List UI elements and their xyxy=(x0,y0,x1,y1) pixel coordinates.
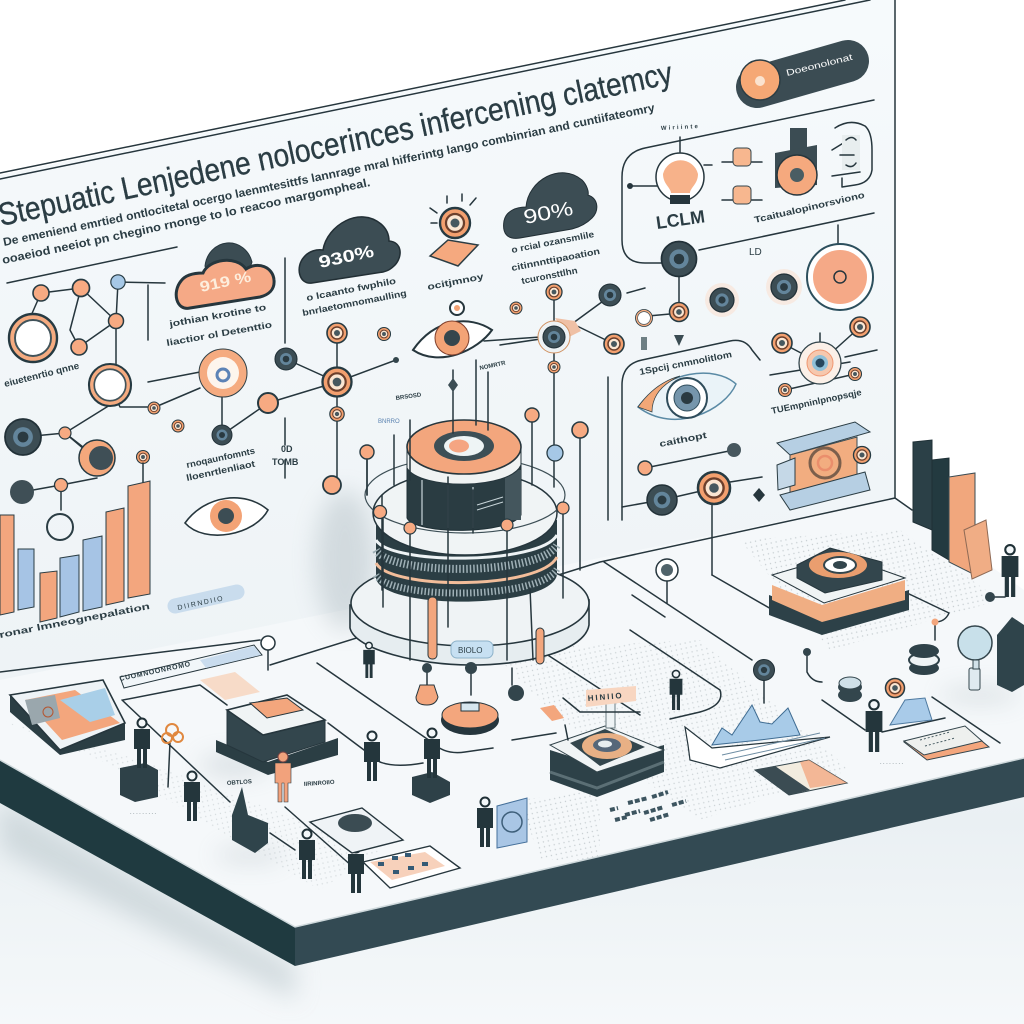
caption: third stat: citinnnttipaoation xyxy=(510,246,601,273)
caption: third stat: tcuronsttlhn xyxy=(520,265,578,286)
caption: dark stat xyxy=(301,276,407,318)
cloud: orange stat xyxy=(176,243,274,308)
tower drum xyxy=(407,462,521,530)
small tags above tower: BRSOSD xyxy=(395,392,422,402)
long pill on floor: CUOMNOONROMO xyxy=(119,661,191,683)
small pill label xyxy=(175,592,237,612)
tower middle disc xyxy=(373,471,557,555)
node row, centre left xyxy=(148,323,399,495)
central eye node cluster xyxy=(484,284,684,354)
floor wiring xyxy=(0,498,1000,867)
label: eye panel: 1Spcij cnmnolitlom xyxy=(638,349,733,377)
small tags above tower xyxy=(378,360,507,425)
icon: layered book stack xyxy=(777,422,870,510)
caption: dark stat: o lcaanto fwphilo xyxy=(305,276,397,303)
tower badge xyxy=(451,641,493,658)
label: large eye: caithopt xyxy=(658,430,708,449)
tower striped bands xyxy=(376,520,557,602)
caption: orange stat: liactior ol Detenttio xyxy=(166,319,273,348)
icon: large eye xyxy=(638,373,736,419)
orange person xyxy=(275,752,291,802)
pedestal left xyxy=(120,763,158,802)
bars, right side xyxy=(913,440,992,579)
orange rings pin xyxy=(162,724,183,787)
tower top white rim xyxy=(407,445,521,484)
pedestal centre xyxy=(412,772,450,803)
centre floor pieces: orange knobs xyxy=(416,662,524,735)
person 5 xyxy=(364,732,380,781)
floor shadows xyxy=(200,490,1020,862)
cloud: dark stat: 930% xyxy=(317,242,376,272)
badge pill: Doeonolonat xyxy=(785,52,854,78)
caption: third stat: o rcial ozansmlile xyxy=(510,229,595,255)
small tags above tower: BNRRO xyxy=(378,419,400,425)
labels on floor: OBTLOS xyxy=(227,779,252,787)
subtitle: ooaeiod neeiot pn chegino rnonge to lo reacoo margompheal. xyxy=(1,177,371,267)
back wall panel xyxy=(0,0,912,680)
label: network: eiuetenrtio qnne xyxy=(3,361,80,390)
obelisk xyxy=(232,787,268,853)
label: bar chart: ronar lmneognepalation xyxy=(0,601,151,640)
flow squares xyxy=(722,148,762,204)
subtitle: De emeniend emrtied ontlocitetal ocergo laenmtesittfs lannrage mral hifferintg lango combinrian and cuntiifateomry xyxy=(2,102,656,249)
labels on floor: · · · · · · · · · xyxy=(130,811,156,817)
cloud: third stat xyxy=(504,173,597,238)
icon: sensor with rays xyxy=(430,194,478,266)
person 8 xyxy=(363,642,375,678)
long pill on floor xyxy=(119,645,262,688)
icon: face outline xyxy=(832,122,872,187)
small pill label: DIIRNDIIO xyxy=(177,595,224,612)
pin lines around tower xyxy=(367,360,608,664)
caption: centre left: lloenrtlenliaot xyxy=(185,459,256,483)
label: sensor: ocitjmnoy xyxy=(426,271,484,292)
badge pill xyxy=(740,52,854,100)
caption: centre left: rnoqaunfomnts xyxy=(185,446,256,470)
person 4 xyxy=(348,844,364,893)
orange tag with stem: HINIIO xyxy=(587,691,622,703)
list tiles xyxy=(610,792,686,820)
arrow: vertical xyxy=(284,258,286,343)
caption: device: Tcaitualopinorsviono xyxy=(753,190,866,225)
cloud: orange stat: 919 % xyxy=(198,268,253,296)
ring with blue forms xyxy=(886,678,932,725)
small tags above tower: NOMRTR xyxy=(479,360,507,372)
device: swirl stack right xyxy=(769,548,909,635)
node links, lower wall xyxy=(622,443,765,575)
label: LCLM: LCLM xyxy=(655,206,706,233)
person 7 xyxy=(477,798,493,847)
caption: centre left: TOMB xyxy=(272,457,299,467)
labels on floor xyxy=(130,761,903,817)
device: central left box xyxy=(216,695,338,775)
small nodes right xyxy=(803,592,1005,656)
cloud: third stat: 90% xyxy=(522,198,575,229)
tower badge: BIOLO xyxy=(458,646,482,655)
device: left platform xyxy=(10,680,125,755)
upper right rounded flow frame xyxy=(622,100,874,263)
caption: radial node: TUEmpninlpnopsqje xyxy=(770,387,862,416)
colour card on floor xyxy=(363,846,460,888)
label: small top tag: Wiriinte xyxy=(661,124,699,132)
person 6 xyxy=(424,728,440,778)
ring pin, floor xyxy=(754,660,774,703)
blue card xyxy=(497,798,527,848)
caption: third stat xyxy=(510,229,601,286)
labels on floor: IIRINROIIO xyxy=(304,780,335,788)
stacked disk large xyxy=(909,644,939,675)
person 9 xyxy=(670,670,682,710)
tower top disc xyxy=(407,420,521,474)
orange tag with stem xyxy=(512,686,640,740)
flat book xyxy=(755,760,847,795)
node row, upper right xyxy=(554,225,873,367)
cloud: dark stat xyxy=(299,217,400,283)
tower outer ring xyxy=(365,457,565,533)
floor platform xyxy=(0,498,1024,966)
tower platform xyxy=(350,560,589,665)
icon: small eye xyxy=(185,498,268,535)
small device on floor xyxy=(310,808,403,853)
keyboard xyxy=(904,726,989,760)
network graph, upper left xyxy=(5,247,396,510)
label: LD: LD xyxy=(749,247,762,258)
central tower xyxy=(350,420,589,665)
radial node xyxy=(770,317,877,396)
person 2 xyxy=(184,772,200,821)
person 1 xyxy=(134,718,150,768)
caption: dark stat: bnrlaetomnomaulling xyxy=(301,288,407,318)
magnifier xyxy=(958,626,992,690)
caption: centre left: 0D xyxy=(281,444,293,454)
dark obelisk right xyxy=(997,617,1024,692)
icon: eye xyxy=(413,301,492,357)
title: Stepuatic Lenjedene nolocerinces infercening clatemcy xyxy=(0,55,675,233)
caption: orange stat xyxy=(166,302,273,348)
ring pin on floor xyxy=(656,559,678,603)
caption: orange stat: jothian krotine to xyxy=(167,302,268,329)
icon: dark device xyxy=(775,128,817,195)
floor front corner line xyxy=(0,758,1024,927)
small coloured card, floor xyxy=(200,672,260,700)
ground shadow xyxy=(0,800,295,1000)
person 11 xyxy=(1002,545,1018,597)
stacked disk small xyxy=(838,677,862,702)
device: swirl stack left xyxy=(550,726,664,797)
person 3 xyxy=(299,830,315,879)
icon: light bulb xyxy=(627,137,712,204)
pin on floor xyxy=(261,636,275,670)
bar chart xyxy=(0,481,150,622)
person 10 xyxy=(866,700,882,752)
caption: centre left xyxy=(185,444,299,483)
blue mountain panel xyxy=(685,705,830,768)
lower right frame xyxy=(622,340,760,520)
labels on floor: · · · · · · · · xyxy=(880,761,903,767)
